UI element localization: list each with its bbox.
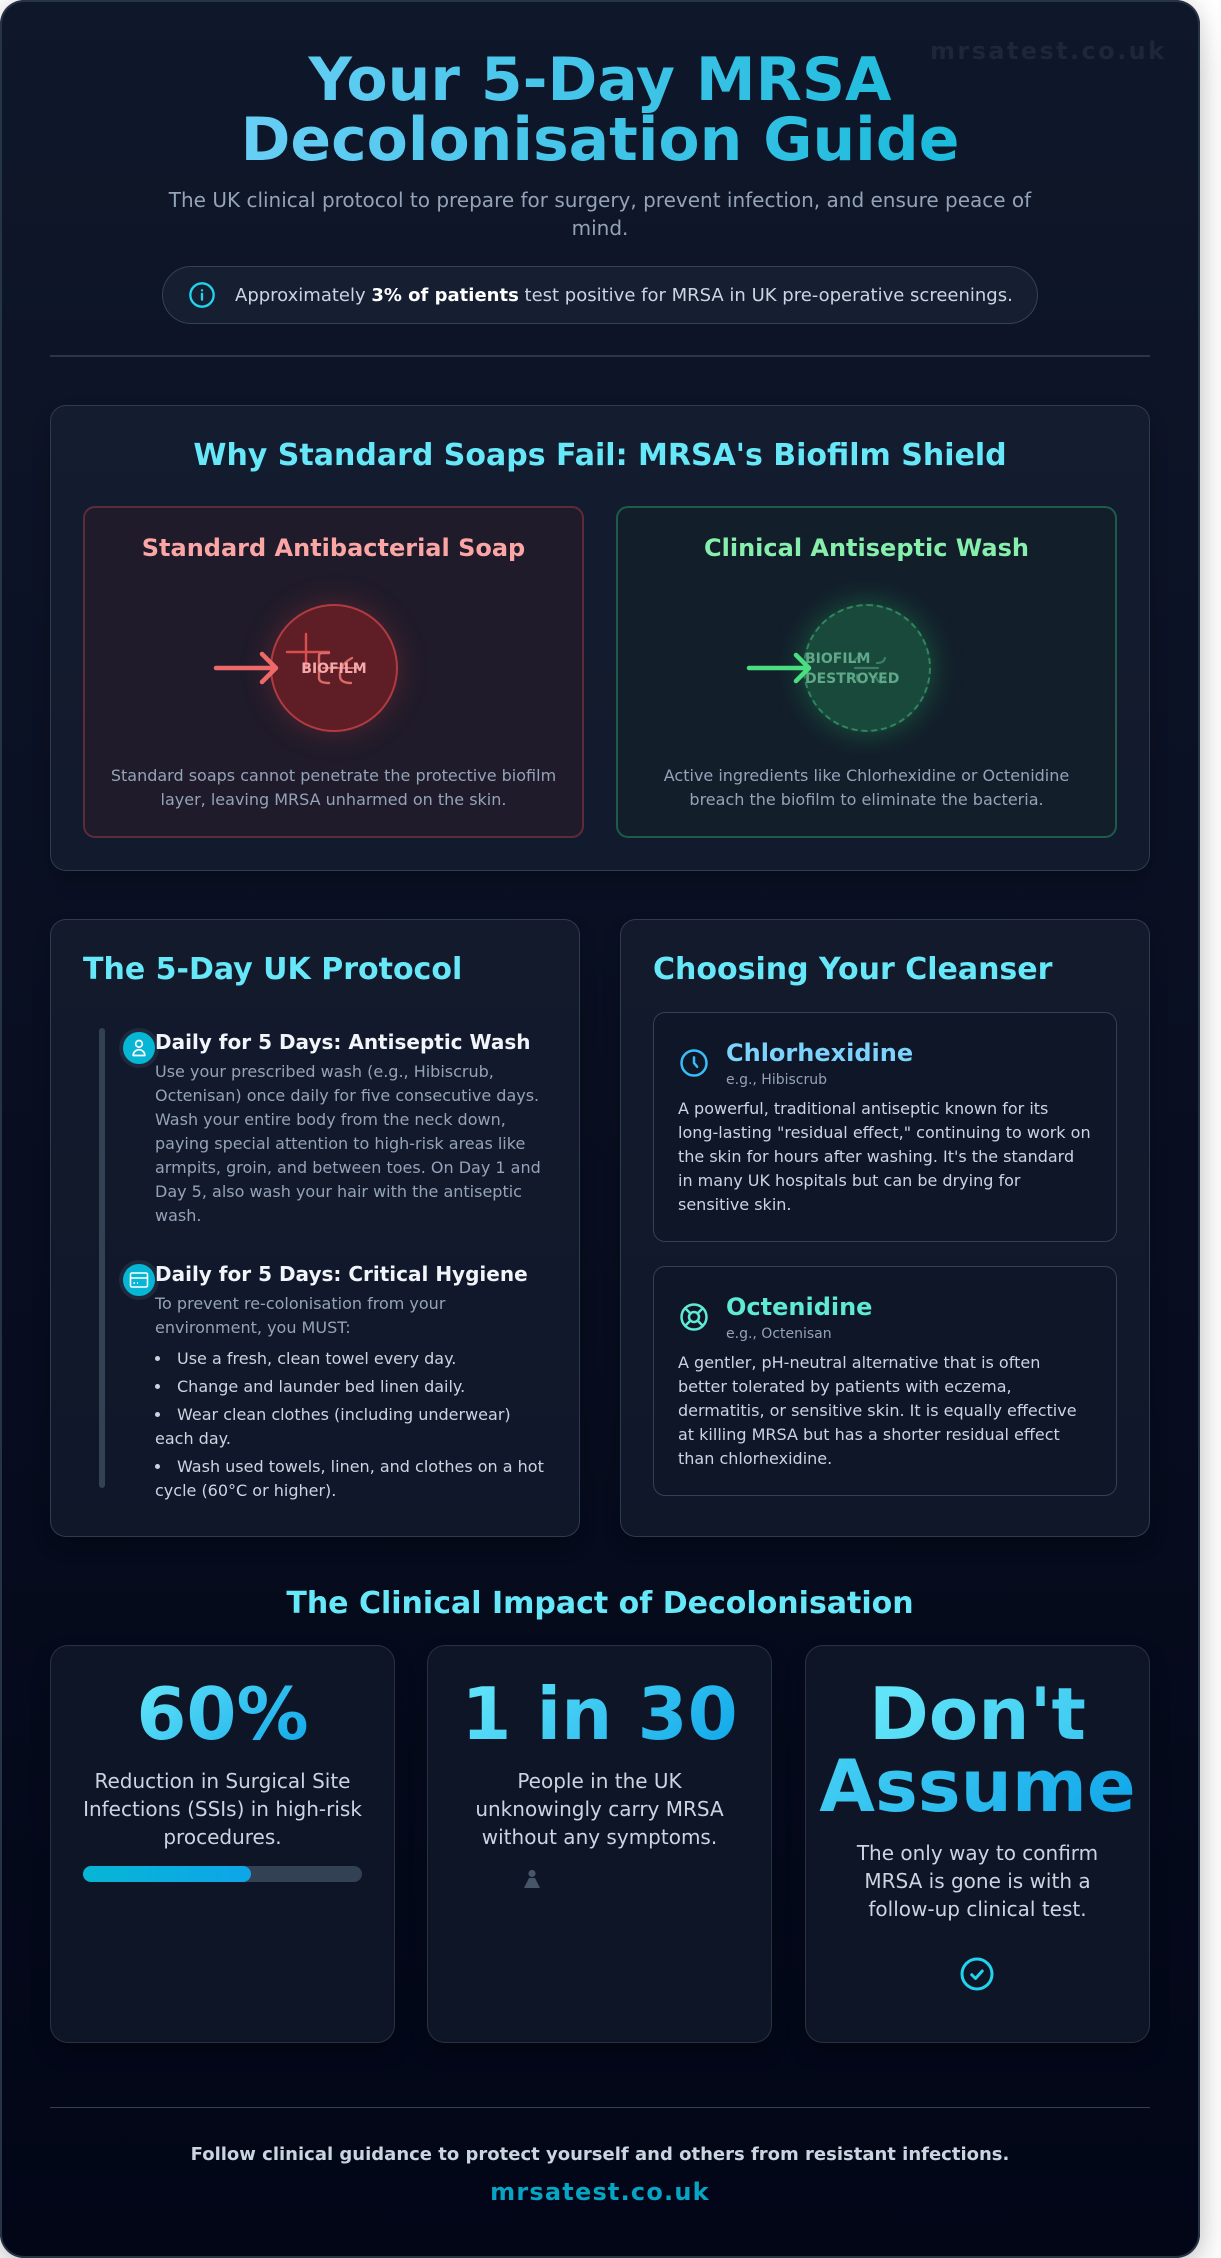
description: long-lasting "residual effect," continuing to work on <box>678 1123 1091 1142</box>
destroyed label: BIOFILM <box>805 651 870 667</box>
stat number: 60% <box>136 1672 309 1756</box>
stat number: Assume <box>819 1744 1136 1828</box>
watermark: mrsatest.co.uk <box>930 37 1166 65</box>
brand example: e.g., Hibiscrub <box>726 1072 827 1088</box>
description: in many UK hospitals but can be drying for <box>678 1171 1020 1190</box>
callout: 3% of patients <box>162 266 1038 324</box>
biofilm circle <box>270 604 398 732</box>
step text <box>154 1294 446 1337</box>
step title: Daily for 5 Days: Critical Hygiene <box>155 1262 528 1286</box>
card: chlorhexidine <box>653 1012 1117 1242</box>
brand example: e.g., Octenisan <box>726 1326 832 1342</box>
description <box>678 1099 1091 1214</box>
stat card: 1 in 30 <box>427 1645 772 2043</box>
subtitle: The UK clinical protocol to prepare for surgery, prevent infection, and ensure peace of <box>169 188 1031 212</box>
card title: Standard Antibacterial Soap <box>142 534 525 562</box>
description: than chlorhexidine. <box>678 1449 832 1468</box>
card caption: Active ingredients like Chlorhexidine or Octenidine <box>664 766 1069 785</box>
stat description <box>475 1769 724 1849</box>
progress fill <box>83 1866 251 1882</box>
icon: person <box>524 1870 540 1888</box>
biofilm label: BIOFILM <box>301 661 367 677</box>
card title: Clinical Antiseptic Wash <box>704 534 1029 562</box>
section heading: The 5-Day UK Protocol <box>83 952 462 987</box>
step text: Use your prescribed wash (e.g., Hibiscrub, <box>155 1062 494 1081</box>
card caption: Standard soaps cannot penetrate the protective biofilm <box>111 766 556 785</box>
hygiene checklist: Change and launder bed linen daily. <box>177 1377 465 1396</box>
title <box>50 50 1150 170</box>
step text: environment, you MUST: <box>155 1318 351 1337</box>
stat description: The only way to confirm <box>857 1841 1098 1865</box>
icon: hygiene step <box>119 1260 159 1300</box>
card: antiseptic wash <box>616 506 1117 838</box>
icon: info <box>189 282 215 308</box>
progress bar <box>83 1866 362 1882</box>
destroyed label: DESTROYED <box>805 671 899 687</box>
step text: wash. <box>155 1206 201 1225</box>
card caption: layer, leaving MRSA unharmed on the skin. <box>161 790 506 809</box>
stat description <box>856 1841 1098 1921</box>
section heading: Why Standard Soaps Fail: MRSA's Biofilm Shield <box>193 438 1007 473</box>
hygiene checklist: Wear clean clothes (including underwear) <box>177 1405 511 1424</box>
destroyed biofilm circle <box>803 604 931 732</box>
icon: clock <box>680 1049 708 1077</box>
stat description <box>83 1769 362 1849</box>
arrow: penetrating <box>746 652 812 684</box>
section heading: Choosing Your Cleanser <box>653 952 1052 987</box>
step text <box>155 1062 541 1225</box>
card glyph <box>130 1272 148 1288</box>
description: better tolerated by patients with eczema, <box>678 1377 1012 1396</box>
icon: life buoy <box>680 1303 708 1331</box>
card: standard soap <box>83 506 584 838</box>
stat description: Infections (SSIs) in high-risk <box>83 1797 362 1821</box>
panel: cleansers <box>620 919 1150 1537</box>
destroyed label <box>805 651 899 687</box>
step title: Daily for 5 Days: Antiseptic Wash <box>155 1030 530 1054</box>
footer url: mrsatest.co.uk <box>490 2178 710 2206</box>
stat number: 1 in 30 <box>461 1672 738 1756</box>
stat number: Don't <box>869 1672 1086 1756</box>
stat description: Reduction in Surgical Site <box>94 1769 350 1793</box>
faded bacteria marks <box>852 656 886 684</box>
description: at killing MRSA but has a shorter residual effect <box>678 1425 1060 1444</box>
stat description: unknowingly carry MRSA <box>475 1797 724 1821</box>
panel: protocol <box>50 919 580 1537</box>
step text: armpits, groin, and between toes. On Day 1 and <box>155 1158 541 1177</box>
step text: Octenisan) once daily for five consecutive days. <box>155 1086 539 1105</box>
hygiene checklist: cycle (60°C or higher). <box>155 1481 336 1500</box>
stat card: 60% <box>50 1645 395 2043</box>
title: Decolonisation Guide <box>241 105 959 175</box>
step 1: antiseptic wash <box>155 1030 541 1225</box>
step text: Day 5, also wash your hair with the antiseptic <box>155 1182 522 1201</box>
section heading: clinical impact: The Clinical Impact of Decolonisation <box>286 1586 914 1621</box>
card caption: breach the biofilm to eliminate the bacteria. <box>689 790 1044 809</box>
step text: To prevent re-colonisation from your <box>155 1294 445 1313</box>
step text: paying special attention to high-risk areas like <box>155 1134 525 1153</box>
arrow: blocked <box>214 652 278 684</box>
description: A powerful, traditional antiseptic known for its <box>678 1099 1048 1118</box>
description: A gentler, pH-neutral alternative that is often <box>678 1353 1040 1372</box>
footer note: Follow clinical guidance to protect yourself and others from resistant infections. <box>191 2144 1009 2165</box>
title: Your 5-Day MRSA <box>308 45 892 115</box>
hygiene checklist <box>155 1349 544 1500</box>
person glyph <box>132 1040 146 1056</box>
description: dermatitis, or sensitive skin. It is equally effective <box>678 1401 1077 1420</box>
stat description: People in the UK <box>517 1769 682 1793</box>
panel: biofilm comparison <box>50 405 1150 871</box>
hygiene checklist: each day. <box>155 1429 231 1448</box>
step 2: critical hygiene <box>154 1262 544 1500</box>
card: octenidine <box>653 1266 1117 1496</box>
icon: wash step <box>119 1028 159 1068</box>
stat card: don't assume <box>805 1645 1150 2043</box>
callout text: Approximately 3% of patients test positive for MRSA in UK pre-operative screenings. <box>235 285 1013 306</box>
name: Octenidine <box>726 1293 872 1321</box>
description: the skin for hours after washing. It's the standard <box>678 1147 1074 1166</box>
step text: Wash your entire body from the neck down, <box>155 1110 506 1129</box>
card caption <box>664 766 1069 809</box>
hygiene checklist: Use a fresh, clean towel every day. <box>177 1349 456 1368</box>
icon: check circle <box>960 1958 994 1990</box>
stat number <box>819 1672 1136 1828</box>
subtitle <box>168 188 1032 240</box>
name: Chlorhexidine <box>726 1039 913 1067</box>
card caption <box>111 766 556 809</box>
timeline rail <box>99 1028 105 1488</box>
subtitle: mind. <box>572 216 628 240</box>
bacteria marks <box>286 632 358 684</box>
stat description: procedures. <box>163 1825 282 1849</box>
hygiene checklist: Wash used towels, linen, and clothes on a hot <box>177 1457 544 1476</box>
description: sensitive skin. <box>678 1195 792 1214</box>
stat description: MRSA is gone is with a <box>864 1869 1091 1893</box>
description <box>678 1353 1077 1468</box>
stat description: follow-up clinical test. <box>868 1897 1087 1921</box>
stat description: without any symptoms. <box>482 1825 717 1849</box>
